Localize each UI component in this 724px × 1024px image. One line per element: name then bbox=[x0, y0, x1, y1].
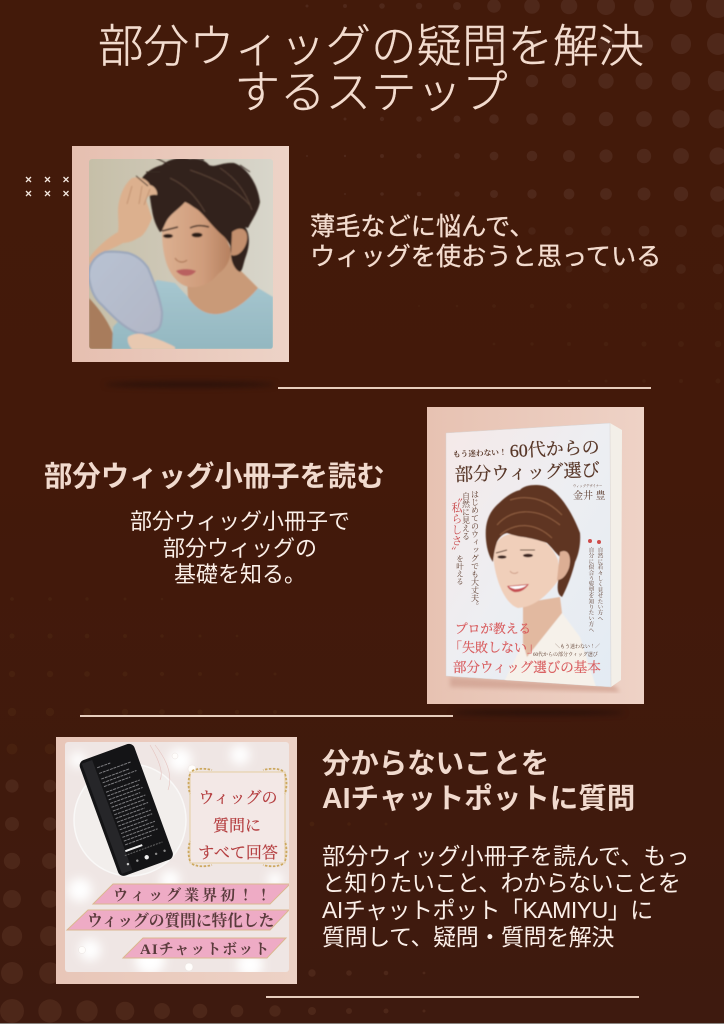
book text: 自然に見える bbox=[460, 491, 470, 540]
divider line 3 bbox=[266, 996, 639, 998]
text: step 2 body: 基礎を知る。 bbox=[174, 562, 306, 587]
book illustration: portrait bbox=[486, 485, 597, 690]
text: step 3 body: 部分ウィッグ小冊子を読んで、もっ bbox=[322, 843, 690, 869]
book text: 部分ウィッグ選び bbox=[454, 460, 600, 485]
heading: step 3 bbox=[322, 748, 635, 815]
pink banner 3 bbox=[123, 938, 286, 958]
shadow under booklet bbox=[452, 710, 624, 715]
text: step 2 body: 部分ウィッグ小冊子で bbox=[130, 509, 350, 534]
gold frame bbox=[188, 769, 286, 866]
book text: 「失敗しない」 bbox=[449, 640, 540, 655]
book text: 部分ウィッグ選びの基本 bbox=[453, 659, 601, 675]
text: step 3 body bbox=[322, 843, 690, 950]
heading: step 3: 分からないことを bbox=[322, 748, 549, 780]
text: step 1: ウィッグを使おうと思っている bbox=[310, 242, 661, 270]
text: step 2 body: 部分ウィッグの bbox=[163, 536, 317, 560]
gold frame text: 質問に bbox=[213, 817, 261, 835]
gold frame text: ウィッグの bbox=[198, 789, 278, 807]
title bbox=[98, 21, 644, 118]
panel: AI chatbot image bbox=[56, 737, 297, 984]
book text: 自分に似合う髪型を知りたい方へ bbox=[587, 546, 594, 632]
text: step 3 body: AIチャットポット「KAMIYU」に bbox=[322, 897, 653, 923]
heading: step 2: 部分ウィッグ小冊子を読む bbox=[44, 461, 385, 493]
title: するステップ bbox=[234, 67, 508, 118]
book text: 60代からの bbox=[509, 437, 600, 461]
title: 部分ウィッグの疑問を解決 bbox=[98, 21, 644, 72]
divider line 2 bbox=[80, 715, 453, 717]
panel: woman with mirror photo bbox=[72, 146, 289, 362]
book text: プロが教える bbox=[455, 621, 531, 636]
panel: booklet cover bbox=[427, 407, 644, 704]
book text: 自然に若々しく見せたい方へ bbox=[596, 546, 603, 621]
book text: ウィッグデザイナー bbox=[573, 483, 602, 488]
text: step 3 body: と知りたいこと、わからないことを bbox=[322, 870, 680, 896]
shadow under photo bbox=[105, 382, 275, 387]
book text: 金井 豊 bbox=[573, 489, 606, 502]
text: step 1 bbox=[310, 213, 661, 270]
book text: 60代からの部分ウィッグ選び bbox=[533, 651, 598, 658]
text: step 3 body: 質問して、疑問・質問を解決 bbox=[322, 924, 614, 950]
icon: cross marks bbox=[26, 176, 69, 196]
icon: smartphone bbox=[78, 742, 175, 878]
pink banner 1: ウィッグ業界初！！ bbox=[113, 886, 274, 904]
gold frame text bbox=[198, 789, 278, 862]
book text bbox=[449, 437, 606, 675]
gold frame text: すべて回答 bbox=[198, 844, 278, 862]
text: step 1: 薄毛などに悩んで、 bbox=[310, 213, 534, 241]
book text: 〝私らしさ〟 bbox=[450, 491, 462, 557]
book text: ＼もう迷わない！／ bbox=[555, 643, 600, 650]
pink banner 3: AIチャットボット bbox=[140, 941, 270, 958]
book text: はじめてのウィッグでも大丈夫。 bbox=[470, 490, 480, 610]
book text: を叶える bbox=[455, 555, 464, 585]
divider line 1 bbox=[278, 387, 651, 389]
pink banner 1 bbox=[93, 884, 290, 904]
book text: もう迷わない！ bbox=[453, 447, 507, 459]
heading: step 3: AIチャットポットに質問 bbox=[322, 783, 635, 815]
text: step 2 body bbox=[130, 509, 350, 587]
pink banner 2: ウィッグの質問に特化した bbox=[87, 911, 274, 930]
